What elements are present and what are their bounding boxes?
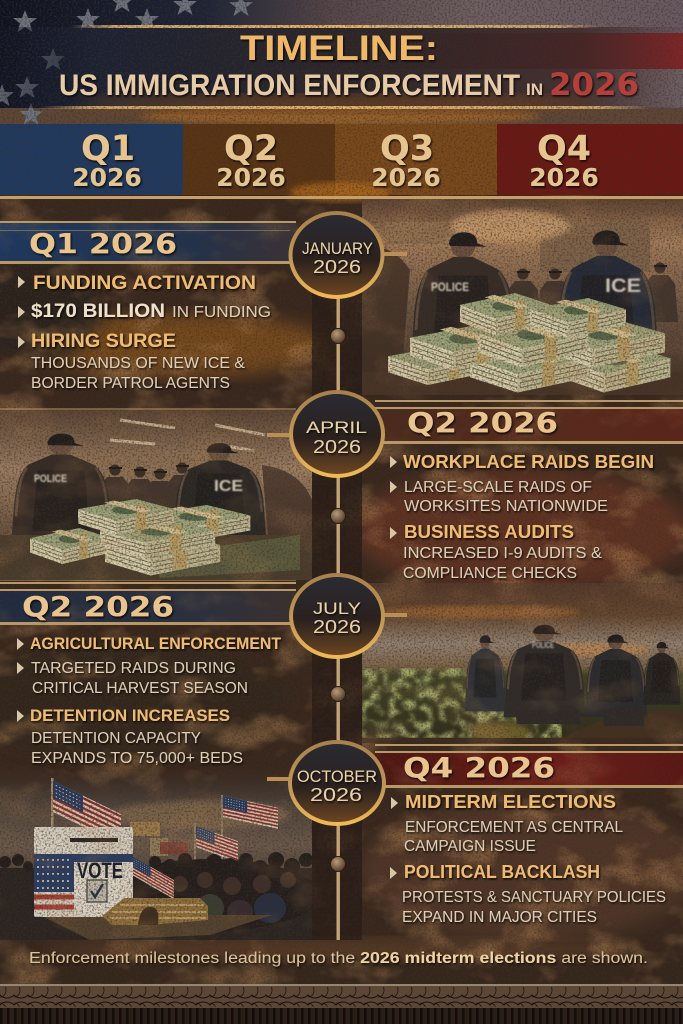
milestone: april: APRIL: [306, 418, 367, 437]
officer vest labels: [34, 276, 641, 650]
panel: q1 funding text: [18, 228, 271, 392]
section header bands: [0, 222, 683, 785]
quarter band: [0, 124, 683, 202]
milestone: april: [267, 392, 383, 476]
quarter labels: [72, 129, 599, 192]
vote label panel: [74, 862, 133, 916]
panel: q4 midterm elections text: CAMPAIGN ISSUE: [404, 838, 536, 855]
timeline spine: [312, 280, 362, 940]
panel: q1 funding text: BORDER PATROL AGENTS: [31, 375, 230, 392]
flag: main on pole: [51, 778, 121, 827]
quarter labels: Q4: [537, 129, 591, 169]
panel: q2 workplace raids text: WORKPLACE RAIDS BEGIN: [403, 452, 654, 472]
panel: q2 agricultural enforcement text: EXPANDS TO 75,000+ BEDS: [31, 750, 243, 767]
officer vest labels: POLICE: [34, 473, 67, 485]
quarter labels: 2026: [529, 163, 599, 192]
checkbox: [87, 880, 107, 902]
title panel: [0, 25, 683, 113]
officer vest labels: POLICE: [431, 280, 469, 294]
image: officers with funding cash: [362, 199, 683, 395]
flag: far right: [221, 795, 278, 865]
milestone: january: [290, 213, 407, 297]
milestone: october: 2026: [310, 785, 362, 805]
panel: q1 funding text: Q1 2026: [29, 228, 177, 260]
panel: q2 workplace raids text: INCREASED I-9 AUDITS &: [403, 545, 603, 562]
milestone: july: 2026: [313, 617, 361, 637]
flag: middle: [194, 822, 238, 862]
milestone: october: OCTOBER: [297, 767, 377, 786]
panel: q1 funding text: HIRING SURGE: [31, 331, 176, 352]
quarter labels: Q2: [224, 129, 278, 169]
main title: TIMELINE:: [240, 29, 438, 68]
image: officers in farm field: [362, 583, 683, 743]
panel: q2 agricultural enforcement text: DETENTION CAPACITY: [31, 730, 201, 747]
panel: q2 workplace raids text: COMPLIANCE CHECKS: [403, 565, 577, 582]
crowd silhouettes: [0, 852, 312, 930]
panel: q4 midterm elections text: ENFORCEMENT AS CENTRAL: [405, 819, 623, 836]
milestone: january: 2026: [313, 257, 361, 277]
panel: q2 agricultural enforcement text: TARGETED RAIDS DURING: [31, 660, 236, 677]
table: [40, 915, 272, 940]
officer vest labels: ICE: [605, 276, 641, 297]
main title: 2026: [549, 67, 639, 103]
vote label: VOTE: [77, 858, 123, 883]
officer vest labels: ICE: [214, 478, 243, 495]
quarter labels: 2026: [371, 163, 441, 192]
panel: q4 midterm elections text: POLITICAL BACKLASH: [404, 862, 600, 882]
timeline nodes: [330, 328, 346, 872]
main title: [59, 29, 639, 103]
quarter labels: 2026: [72, 163, 142, 192]
main title: US IMMIGRATION ENFORCEMENT: [59, 69, 520, 102]
panel: q2 workplace raids text: Q2 2026: [407, 407, 558, 439]
panel: q2 workplace raids text: LARGE-SCALE RAIDS OF: [404, 479, 592, 496]
panel: q4 midterm elections text: Q4 2026: [403, 752, 555, 784]
header flag backdrop: [0, 0, 683, 125]
image: ballot box and protest crowd: [0, 768, 320, 940]
milestone: july: JULY: [313, 599, 361, 618]
milestone: april: 2026: [313, 437, 361, 457]
image: officers at worksite with cash: [0, 410, 312, 580]
stack of ballots: [102, 898, 208, 925]
panel: q4 midterm elections text: PROTESTS & SANCTUARY POLICIES: [402, 889, 666, 906]
quarter labels: 2026: [216, 163, 286, 192]
milestone: october: [267, 742, 384, 824]
main title: IN: [526, 80, 543, 99]
panel: q2 agricultural enforcement text: DETENTION INCREASES: [30, 706, 230, 725]
quarter labels: Q1: [81, 129, 135, 169]
panel: q2 agricultural enforcement text: CRITICAL HARVEST SEASON: [32, 680, 248, 697]
panel: q1 funding text: $170 BILLION: [31, 301, 165, 322]
milestone: january: JANUARY: [302, 239, 373, 258]
officer vest labels: POLICE: [532, 640, 554, 650]
panel: q1 funding text: THOUSANDS OF NEW ICE &: [31, 355, 246, 372]
panel: q4 midterm elections text: EXPAND IN MAJOR CITIES: [402, 909, 597, 926]
panel: q4 midterm elections text: [390, 752, 666, 926]
milestone: july: [291, 575, 407, 657]
gold section rules: [0, 196, 683, 788]
rust wash over lower sections: [0, 199, 683, 989]
panel: q2 workplace raids text: [390, 407, 654, 582]
panel: q4 midterm elections text: MIDTERM ELECTIONS: [405, 792, 616, 812]
barbed wire footer: [0, 984, 683, 1024]
panel: q2 agricultural enforcement text: AGRICULTURAL ENFORCEMENT: [30, 635, 281, 653]
panel: q2 agricultural enforcement text: [17, 591, 281, 767]
panel: q1 funding text: IN FUNDING: [172, 304, 271, 321]
quarter labels: Q3: [380, 129, 434, 169]
panel: q1 funding text: FUNDING ACTIVATION: [33, 273, 256, 294]
panel: q2 agricultural enforcement text: Q2 2026: [22, 591, 174, 623]
panel: q2 workplace raids text: BUSINESS AUDITS: [404, 522, 574, 542]
footer note: Enforcement milestones leading up to the 2026 midterm elections are shown.: [29, 950, 648, 967]
flag: behind box: [132, 856, 174, 899]
ballot box: [34, 827, 133, 917]
panel: q2 workplace raids text: WORKSITES NATIONWIDE: [404, 498, 608, 515]
